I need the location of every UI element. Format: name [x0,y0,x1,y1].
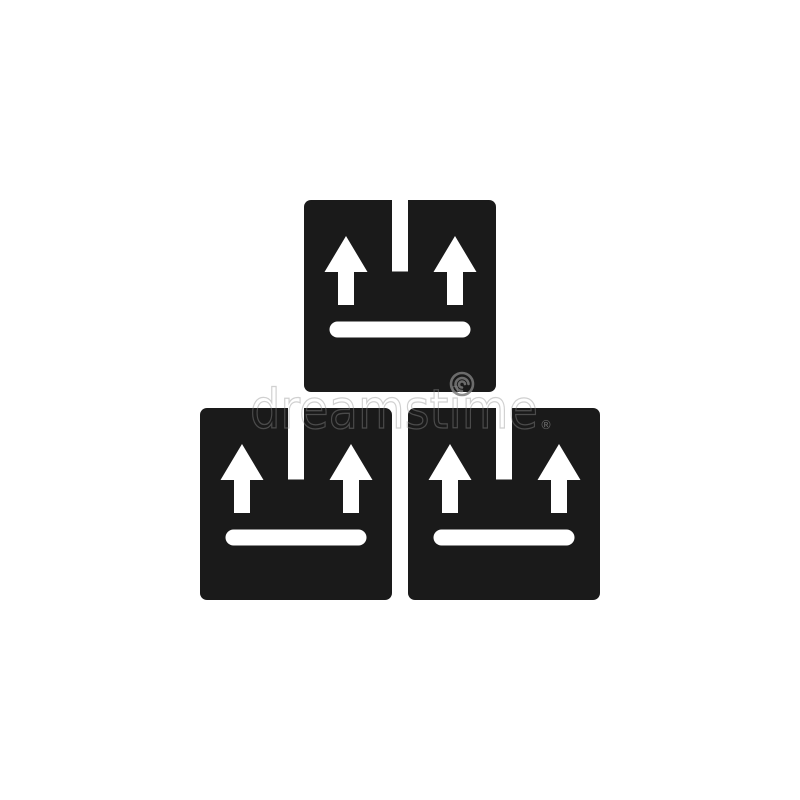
icon: top box with up arrows [304,198,496,392]
icon: bottom left box with up arrows [200,406,392,600]
watermark: registered mark: ® [540,418,552,432]
watermark: brand text: dreamstime [250,378,538,441]
watermark: spiral logo [451,373,473,395]
icon: bottom right box with up arrows [408,406,600,600]
